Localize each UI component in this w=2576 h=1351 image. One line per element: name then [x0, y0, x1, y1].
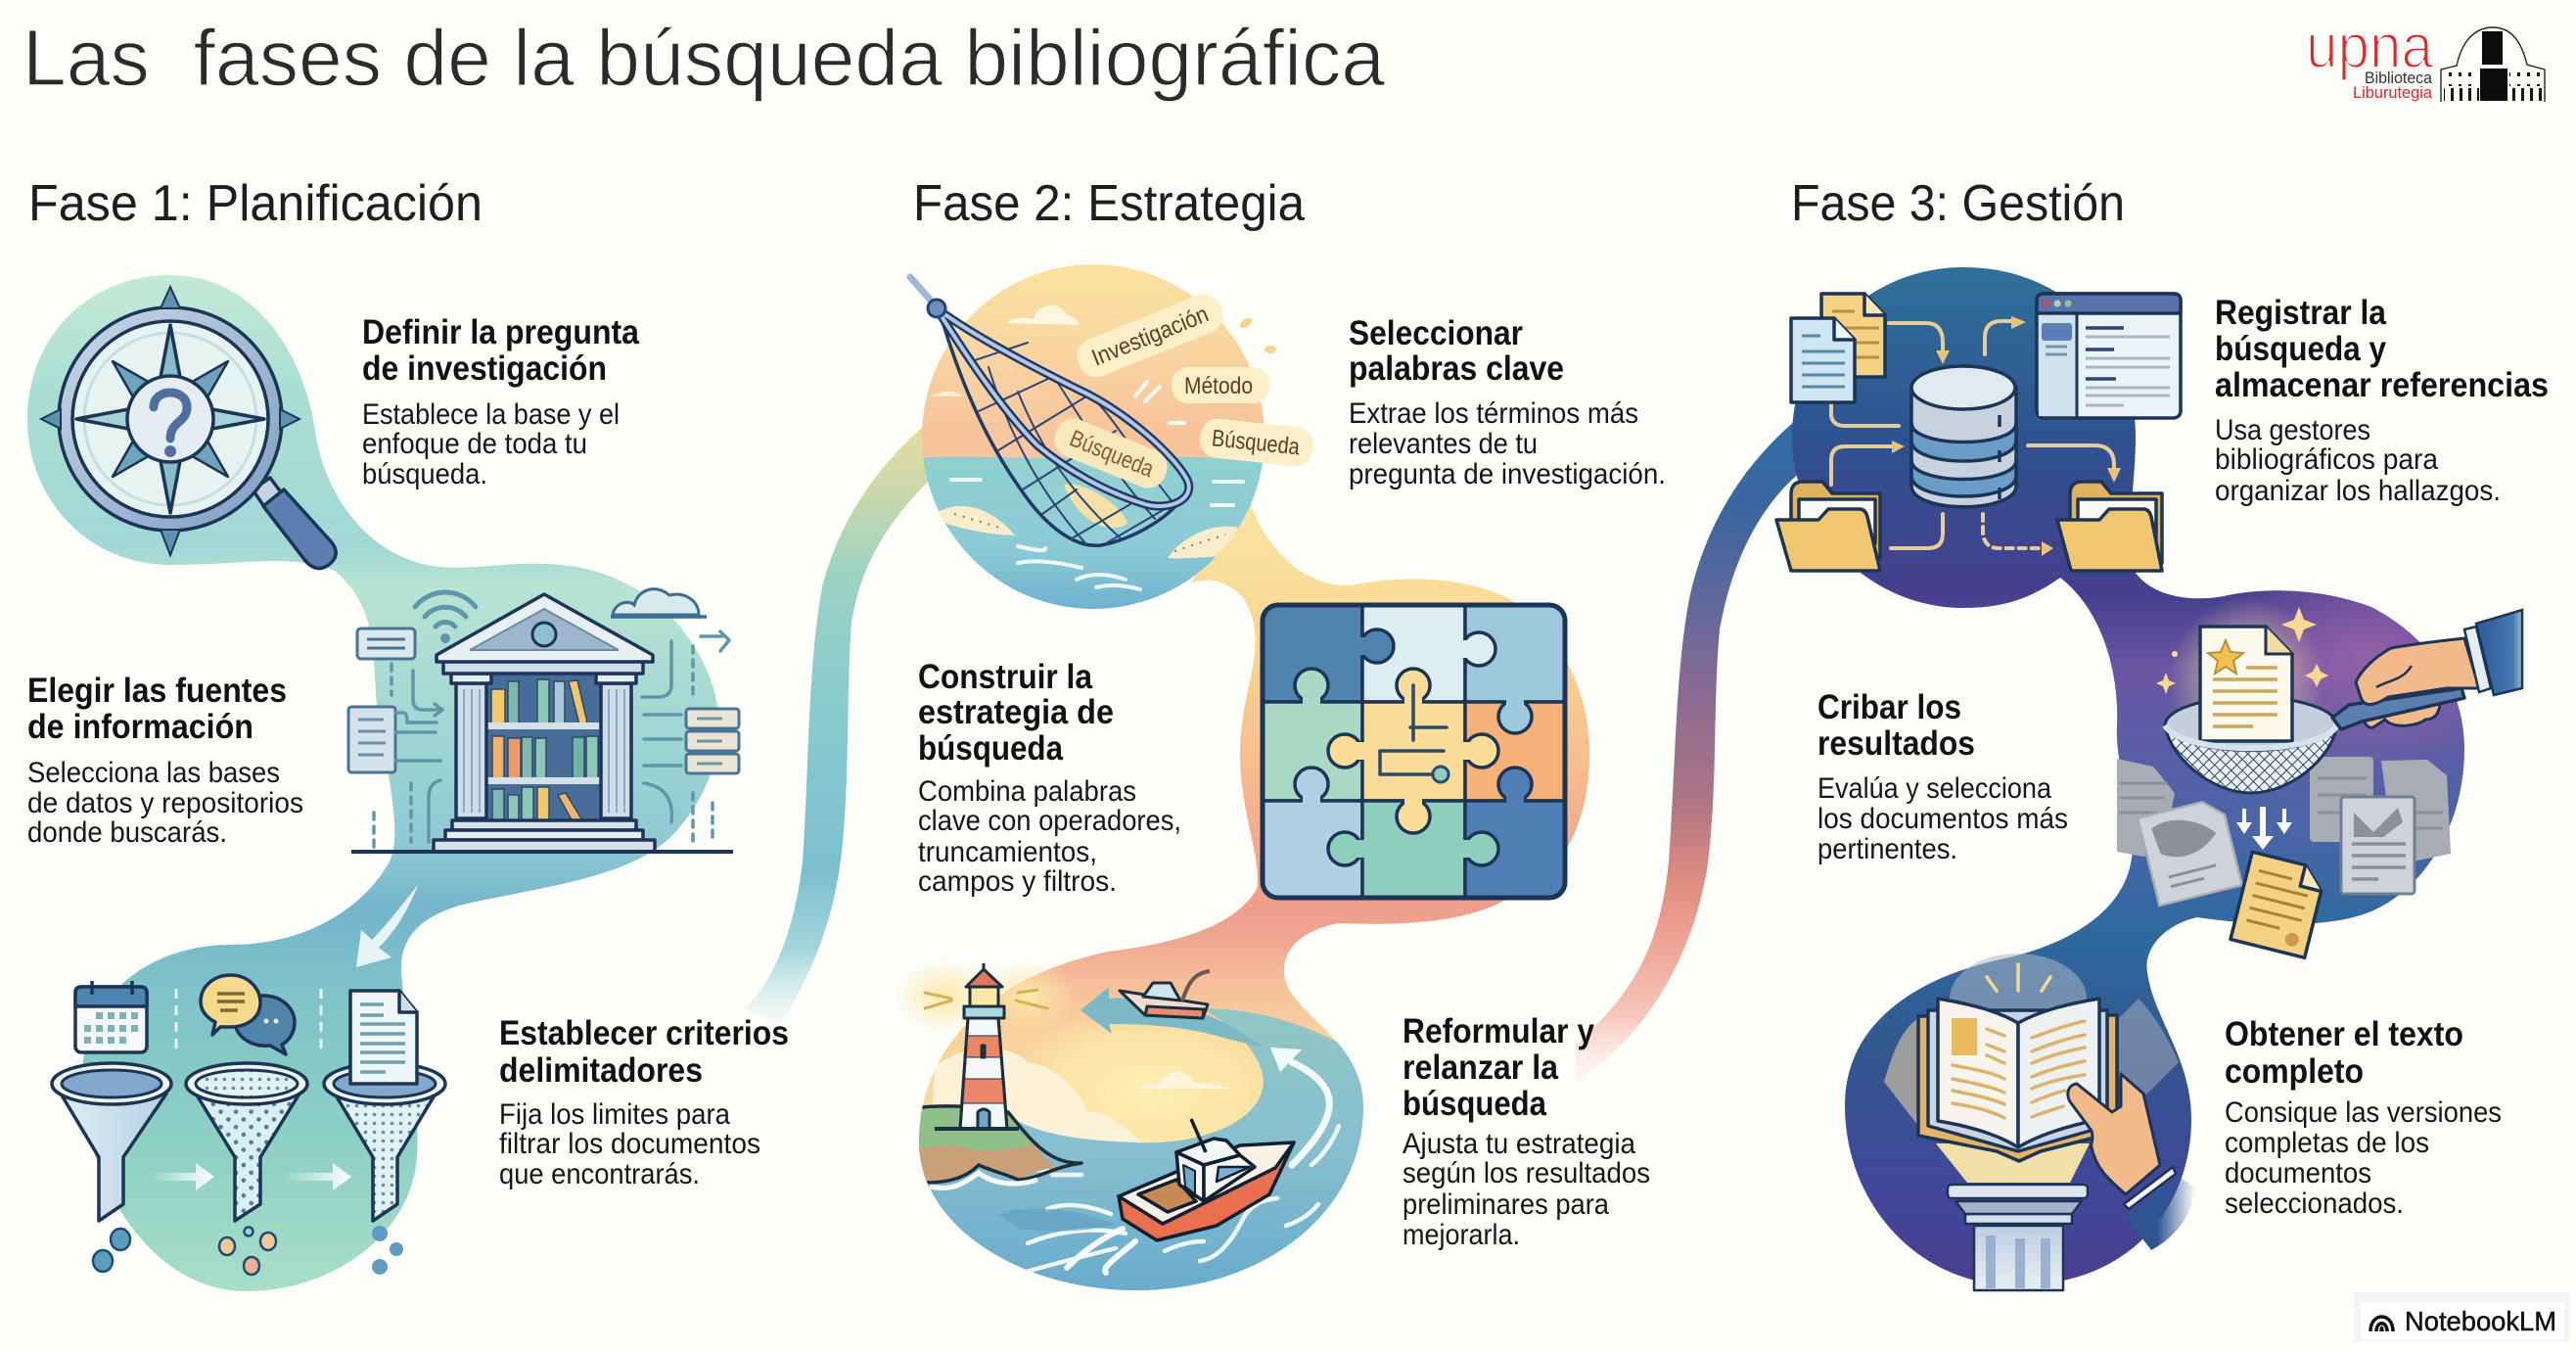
- tag: investigación: Investigación: [1088, 301, 1213, 372]
- hand: [2068, 1074, 2160, 1194]
- step: establecer criterios: [499, 1014, 789, 1190]
- selected yellow document: [2231, 852, 2326, 957]
- body: mejorarla.: [1403, 1219, 1520, 1251]
- heading: [2225, 1015, 2463, 1091]
- icon: sieve with documents: [2117, 597, 2522, 957]
- ribbon: connector fase 2 to fase 3: [1576, 416, 1801, 1082]
- body: pregunta de investigación.: [1349, 458, 1666, 490]
- body: Combina palabras: [918, 775, 1136, 808]
- net rim: [937, 308, 1189, 506]
- tag: método: Método: [1184, 373, 1253, 399]
- sand shapes: [930, 506, 1263, 558]
- body: Selecciona las bases: [27, 757, 280, 789]
- logo: upna biblioteca: [2306, 11, 2545, 102]
- sieve back: [2165, 697, 2337, 754]
- heading: Reformular y: [1403, 1012, 1594, 1050]
- heading: [2215, 294, 2549, 404]
- app window: [2037, 294, 2181, 418]
- heading: fase 3: Fase 3: Gestión: [1791, 175, 2125, 232]
- body: preliminares para: [1403, 1188, 1610, 1221]
- light beams: [896, 959, 993, 1034]
- boat wake: [1067, 1229, 1135, 1273]
- icon: open book on column: [1884, 954, 2195, 1290]
- heading: almacenar referencias: [2215, 366, 2549, 404]
- divider dashes: [176, 989, 321, 1052]
- scene: net blob: [910, 255, 1315, 617]
- discarded documents: [2117, 757, 2451, 862]
- roof: [437, 594, 653, 674]
- tag: método: [1172, 367, 1269, 403]
- net tag: búsqueda: Búsqueda: [1066, 425, 1158, 483]
- step: cribar los resultados: [1817, 688, 2068, 865]
- icon: speech box: [357, 629, 415, 659]
- panel: fase 1 blob: [27, 275, 719, 1291]
- logo: upna biblioteca: Liburutegia: [2353, 83, 2433, 102]
- heading: Registrar la: [2215, 294, 2386, 332]
- funnel 2 mesh: [186, 1063, 307, 1221]
- body: Extrae los términos más: [1349, 397, 1638, 430]
- body: enfoque de toda tu: [362, 428, 587, 460]
- tag: búsqueda: [1198, 417, 1315, 468]
- body: completas de los: [2225, 1127, 2429, 1159]
- icon: wifi: [415, 592, 476, 640]
- sparkle flecks: [1238, 316, 1276, 353]
- clouds: [930, 1048, 1145, 1145]
- scene: lighthouse and boats: [896, 959, 1370, 1302]
- heading: búsqueda: [918, 729, 1063, 768]
- net contents glow: [1064, 484, 1127, 528]
- books: [491, 679, 598, 823]
- step: construir la estrategia: [918, 658, 1181, 898]
- body: Fija los limites para: [499, 1098, 731, 1131]
- heading: búsqueda: [1403, 1085, 1546, 1123]
- column: [1948, 1185, 2088, 1290]
- puzzle circuit: [1380, 685, 1447, 774]
- down arrows: [2236, 807, 2292, 850]
- icon: database and flows: [1776, 294, 2181, 571]
- teal arrow: [1081, 987, 1263, 1048]
- net handle: [910, 277, 932, 302]
- sieve handle: [2332, 688, 2464, 729]
- icon: calendar: [75, 981, 147, 1052]
- document halo: [2168, 597, 2324, 764]
- cuff: [2124, 1167, 2176, 1209]
- body: documentos: [2225, 1157, 2371, 1189]
- body: los documentos más: [1817, 803, 2068, 835]
- heading: búsqueda y: [2215, 330, 2386, 368]
- heading: [362, 313, 639, 388]
- phase headings: [28, 175, 2125, 232]
- columns: [451, 674, 636, 818]
- lighthouse: [935, 963, 1019, 1129]
- funnel 3 fine mesh: [324, 1063, 445, 1221]
- sleeve: [2126, 1175, 2195, 1250]
- heading: estrategia de: [918, 693, 1114, 731]
- sleeve and cuff: [2476, 610, 2522, 695]
- light rays: [1987, 964, 2050, 991]
- heading: relanzar la: [1403, 1048, 1558, 1087]
- heading: Definir la pregunta: [362, 313, 639, 351]
- book page lines: [1952, 1018, 1977, 1055]
- body: [27, 757, 303, 849]
- sun glow: [1039, 1022, 1263, 1142]
- steps: [434, 820, 655, 852]
- body: pertinentes.: [1817, 833, 1957, 865]
- purple glow in sieve blob: [2237, 591, 2463, 766]
- ribbon: connector fase 1 to fase 2: [744, 421, 930, 1024]
- body: seleccionados.: [2225, 1188, 2404, 1220]
- icon: server stack: [686, 709, 739, 773]
- heading: [1817, 688, 1975, 763]
- sparkles: [2156, 607, 2328, 694]
- body: filtrar los documentos: [499, 1128, 760, 1160]
- body: [499, 1098, 760, 1190]
- heading: Construir la: [918, 658, 1092, 696]
- net tag: búsqueda: [1049, 413, 1173, 493]
- icon: library building: [348, 589, 739, 852]
- logo: upna biblioteca: Biblioteca: [2365, 69, 2433, 87]
- net bag: [940, 311, 1179, 545]
- body: [1349, 397, 1666, 490]
- body: búsqueda.: [362, 458, 487, 490]
- body: según los resultados: [1403, 1157, 1650, 1189]
- heading: Obtener el texto: [2225, 1015, 2463, 1053]
- heading: [499, 1014, 789, 1090]
- puzzle frame: [1263, 605, 1565, 898]
- heading: [1403, 1012, 1594, 1123]
- hand lower fingers: [2363, 685, 2440, 727]
- body: [362, 398, 620, 490]
- panel: fase 3 blob: [1792, 267, 2464, 1285]
- step: seleccionar palabras clave: [1349, 314, 1666, 490]
- sieve bowl: [2165, 725, 2337, 793]
- icon: document box: [348, 707, 395, 772]
- title: Las fases de la búsqueda bibliográfica: [23, 14, 1385, 103]
- body: donde buscarás.: [27, 816, 227, 849]
- funnel 1 solid: [52, 1063, 171, 1221]
- body: [1403, 1128, 1650, 1251]
- heading: [918, 658, 1114, 768]
- dots filtered: [93, 1226, 403, 1275]
- body: bibliográficos para: [2215, 443, 2439, 476]
- island: [910, 1106, 1059, 1182]
- light beam: [1936, 1143, 2090, 1183]
- database: [1911, 366, 2016, 507]
- folder right: [2057, 482, 2162, 571]
- hand upper: [2356, 638, 2479, 705]
- logo: upna biblioteca: upna: [2306, 11, 2433, 81]
- heading: delimitadores: [499, 1051, 703, 1090]
- body: Consique las versiones: [2225, 1096, 2502, 1129]
- folder left: [1776, 482, 1880, 571]
- body: clave con operadores,: [918, 805, 1181, 837]
- heading: de investigación: [362, 349, 607, 388]
- icon: cloud: [613, 589, 699, 615]
- body: [918, 775, 1181, 898]
- step: obtener el texto completo: [2225, 1015, 2502, 1220]
- body: relevantes de tu: [1349, 428, 1538, 460]
- tag: búsqueda: Búsqueda: [1211, 425, 1302, 461]
- body: de datos y repositorios: [27, 787, 303, 819]
- book: [1918, 999, 2117, 1161]
- body: [1817, 772, 2068, 865]
- body: truncamientos,: [918, 836, 1097, 868]
- icon: document in funnel: [350, 991, 417, 1084]
- arrows between funnels: [149, 1163, 351, 1190]
- flow arrows: [1831, 321, 2114, 548]
- body: Establece la base y el: [362, 398, 620, 431]
- yellow document: [1821, 294, 1885, 377]
- step: registrar la búsqueda: [2215, 294, 2549, 507]
- funnels: [52, 1063, 445, 1221]
- badge: NotebookLM: [2354, 1292, 2569, 1342]
- heading: Cribar los: [1817, 688, 1961, 726]
- step: reformular y relanzar: [1403, 1012, 1650, 1251]
- body: Usa gestores: [2215, 414, 2370, 446]
- heading: resultados: [1817, 724, 1975, 763]
- starred document: [2200, 627, 2292, 741]
- small boat: [1120, 971, 1210, 1018]
- body: que encontrarás.: [499, 1158, 700, 1190]
- heading: palabras clave: [1349, 349, 1564, 388]
- body: organizar los hallazgos.: [2215, 475, 2501, 507]
- body: Evalúa y selecciona: [1817, 772, 2052, 805]
- icon: compass magnifier: [41, 287, 336, 569]
- heading: Elegir las fuentes: [27, 672, 287, 710]
- heading: Seleccionar: [1349, 314, 1523, 352]
- step: definir la pregunta: [362, 313, 639, 490]
- badge: NotebookLM: NotebookLM: [2405, 1306, 2556, 1336]
- body: [2225, 1096, 2502, 1220]
- panel: fase 2 blob: [919, 480, 1589, 1290]
- heading: fase 1: Fase 1: Planificación: [28, 175, 483, 232]
- light glow: [1950, 954, 2087, 1044]
- icon: data links: [374, 631, 729, 847]
- sea: [900, 1008, 1370, 1302]
- blue document: [1791, 318, 1855, 402]
- icon: puzzle: [1263, 605, 1565, 898]
- heading: completo: [2225, 1052, 2364, 1091]
- heading: [27, 672, 287, 746]
- large boat: [1119, 1119, 1294, 1240]
- heading: [1349, 314, 1564, 388]
- icon: chat bubbles: [201, 975, 295, 1054]
- body: campos y filtros.: [918, 865, 1117, 898]
- heading: Establecer criterios: [499, 1014, 789, 1052]
- white swirl arrow: [1292, 1062, 1329, 1165]
- body: Ajusta tu estrategia: [1403, 1128, 1636, 1160]
- icon: white arrow down: [356, 885, 418, 967]
- heading: de información: [27, 708, 253, 746]
- step: elegir las fuentes: [27, 672, 303, 849]
- body: [2215, 414, 2501, 507]
- heading: fase 2: Fase 2: Estrategia: [913, 175, 1305, 232]
